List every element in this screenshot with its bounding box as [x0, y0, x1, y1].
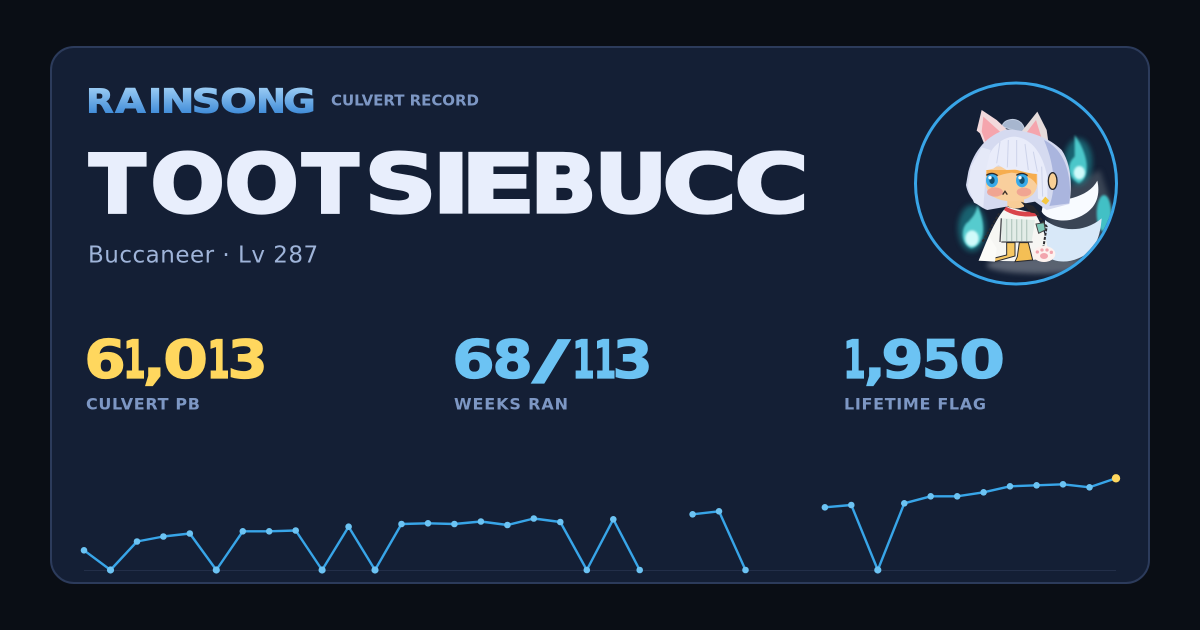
ear [1048, 173, 1057, 189]
brand logo: RAINSONG: N [161, 82, 194, 120]
brand logo: RAINSONG: N [256, 82, 286, 120]
brand logo: RAINSONG: O [220, 82, 257, 120]
value: 68/113: 1 [594, 330, 616, 391]
value: 61,013: 1 [207, 330, 230, 391]
value: 61,013: 6 [84, 330, 126, 391]
tail shadow [1047, 170, 1117, 267]
value: 1,950: 9 [881, 330, 924, 391]
heading: player name: E [460, 138, 536, 231]
avatar ring [916, 83, 1116, 284]
right ear inner [1027, 120, 1042, 137]
value: 61,013: 3 [228, 330, 268, 391]
collar [1004, 207, 1037, 217]
avatar art [958, 110, 1117, 274]
blush left [987, 187, 1003, 197]
neck [1007, 198, 1024, 209]
stripes [1007, 219, 1027, 241]
data points [81, 481, 1093, 574]
heading: player name: T [89, 138, 146, 231]
hair strands [997, 140, 1043, 197]
line segment 3 [825, 478, 1116, 570]
flame left [958, 205, 986, 252]
latest data point [1112, 474, 1120, 482]
paw [1036, 246, 1056, 262]
hair right shade [1044, 140, 1070, 206]
upper tail [1042, 181, 1098, 221]
left ear [977, 110, 1007, 146]
value: 1,950: 0 [959, 330, 1005, 391]
face [986, 167, 1037, 201]
heading: player name: U [594, 138, 667, 231]
left ear inner [982, 117, 1000, 143]
heading: player name: O [225, 138, 299, 231]
flame top right [1064, 135, 1092, 185]
ground shadow [987, 256, 1093, 274]
value: 68/113: 3 [612, 330, 653, 391]
robe [979, 207, 1048, 261]
flame right [1097, 195, 1111, 232]
heading: player name: I [433, 138, 470, 231]
value: 61,013: , [143, 330, 166, 391]
heading: player name: T [302, 138, 359, 231]
brand logo: RAINSONG: I [148, 82, 162, 120]
subtitle: culvert record: CULVERT RECORD [331, 92, 479, 110]
record card graphic [50, 46, 1150, 584]
value: 1,950: , [864, 330, 886, 391]
label: culvert pb: CULVERT PB [86, 394, 200, 414]
right leg [1015, 243, 1033, 262]
value: 68/113: / [532, 330, 571, 391]
right ear [1022, 112, 1048, 140]
brand logo: RAINSONG: R [86, 82, 114, 120]
eye left [986, 173, 998, 187]
legs [993, 243, 1015, 262]
panel: card [51, 47, 1149, 583]
hair bump [1002, 118, 1024, 131]
bangs [985, 137, 1047, 203]
stat: culvert pb [84, 330, 268, 414]
icon: avatar portrait [916, 83, 1117, 284]
gold star earring [1041, 197, 1049, 205]
heading: player name: C [662, 138, 736, 231]
dark shoulder [1021, 202, 1040, 214]
value: 68/113: 6 [452, 330, 495, 391]
striped top [1002, 218, 1035, 242]
robe hem [978, 254, 996, 262]
line segment 2 [693, 511, 746, 570]
blush right [1017, 188, 1031, 196]
brand logo: RAINSONG: G [283, 82, 316, 120]
mouth [1003, 191, 1007, 195]
waist shadow [1000, 218, 1033, 242]
stat: lifetime flag [843, 330, 1005, 414]
stat: weeks ran [452, 330, 653, 414]
heading: player name: O [151, 138, 225, 231]
line segment 1 [84, 518, 640, 570]
heading: player name: S [364, 138, 436, 231]
value: 68/113: 8 [492, 330, 533, 391]
cheek shading [987, 170, 1037, 185]
value: 61,013: 0 [163, 330, 208, 391]
hair back [966, 129, 1071, 210]
left hair lock [968, 147, 991, 207]
value: 1,950: 1 [843, 330, 866, 391]
heading: player name: B [530, 138, 596, 231]
label: lifetime flag: LIFETIME FLAG [844, 394, 986, 414]
charms [1036, 223, 1045, 233]
label: weeks ran: WEEKS RAN [454, 394, 568, 414]
value: 68/113: 1 [572, 330, 595, 391]
lower tail [1045, 218, 1102, 262]
value: 61,013: 1 [123, 330, 146, 391]
text: class and level: Buccaneer · Lv 287 [88, 242, 319, 268]
eye right [1016, 173, 1028, 187]
brand logo: RAINSONG: S [192, 82, 221, 120]
line chart: weekly culvert scores [81, 474, 1120, 574]
heading: player name: C [734, 138, 808, 231]
chart baseline [84, 570, 1116, 572]
value: 1,950: 5 [922, 330, 961, 391]
sleeve outline [982, 213, 1048, 246]
brand logo: RAINSONG: A [115, 82, 146, 120]
